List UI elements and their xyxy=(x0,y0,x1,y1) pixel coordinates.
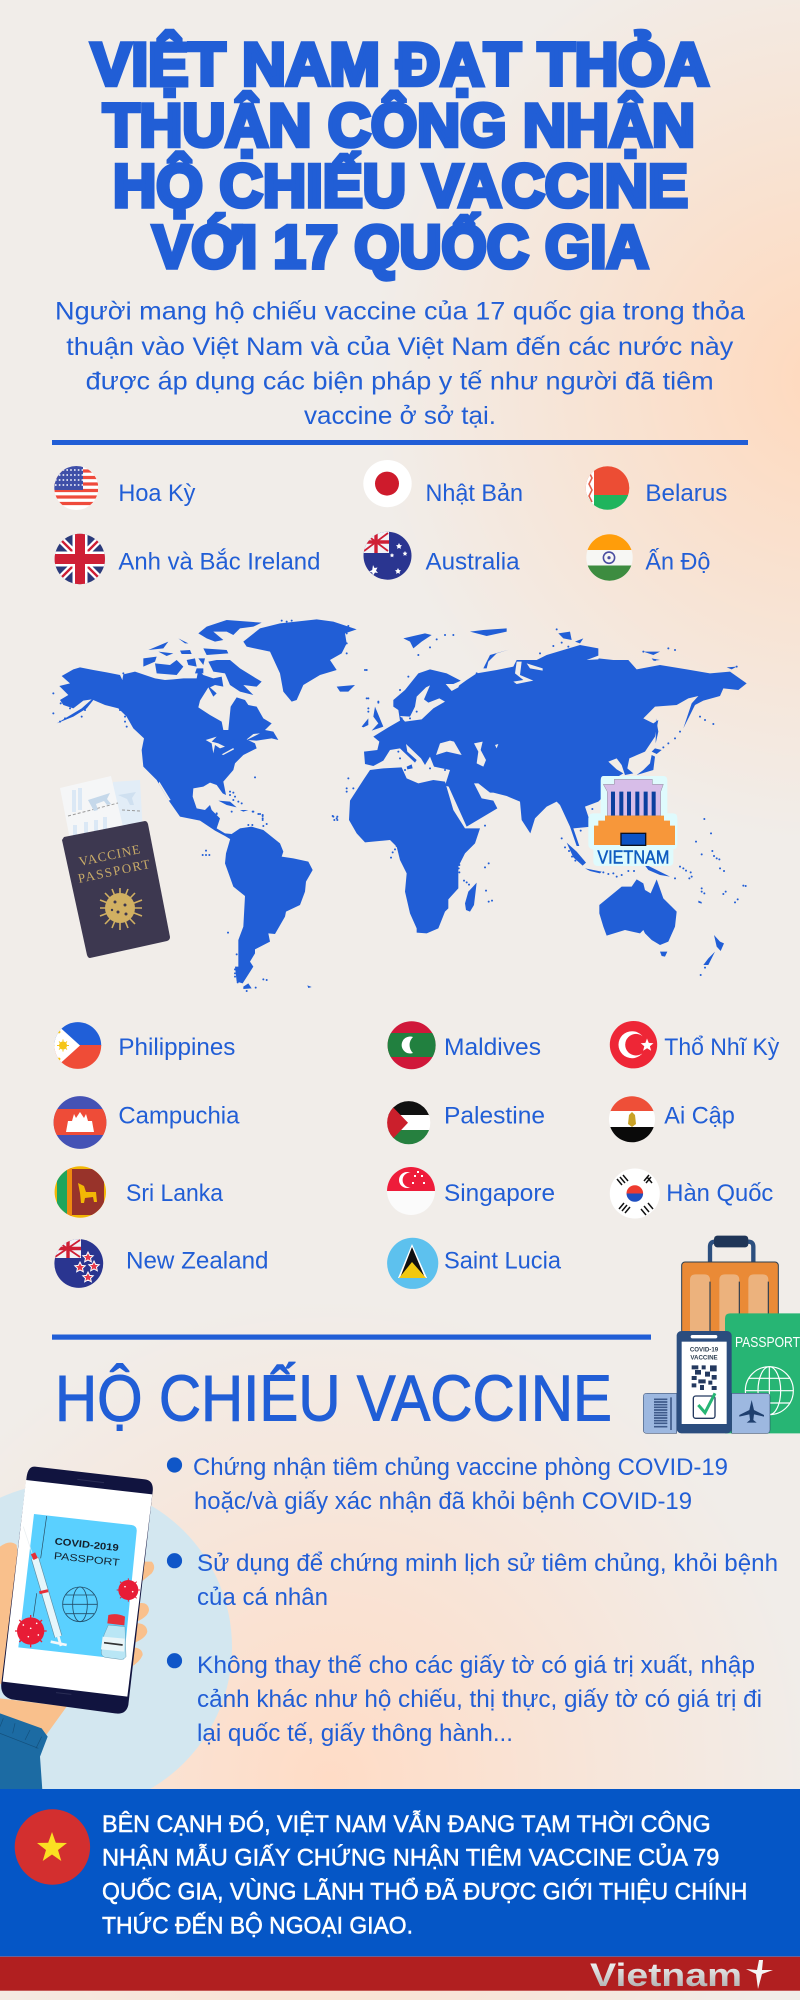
panel: bottom banner: QUỐC GIA, VÙNG LÃNH THỔ ĐÃ ĐƯỢC GIỚI THIỆU CHÍNH xyxy=(102,1878,747,1906)
flag row: Campuchia: Campuchia xyxy=(118,1102,240,1129)
virus emblem xyxy=(100,888,142,930)
icon: vaccine passport with tickets xyxy=(60,776,170,958)
flag row: Saint Lucia: Saint Lucia xyxy=(444,1248,562,1275)
South America and Madagascar xyxy=(203,812,492,991)
title: HỘ CHIẾU VACCINE xyxy=(113,153,688,220)
panel: bottom banner: NHẬN MẪU GIẤY CHỨNG NHẬN TIÊM VACCINE CỦA 79 xyxy=(102,1843,719,1872)
phone xyxy=(1,1467,153,1714)
intro paragraph: Người mang hộ chiếu vaccine của 17 quốc gia trong thỏa xyxy=(55,298,745,326)
Southeast Asia and Oceania xyxy=(562,809,746,975)
bullet 3: Không thay thế cho các giấy tờ có giá trị xuất, nhập xyxy=(197,1652,755,1679)
intro paragraph: vaccine ở sở tại. xyxy=(304,402,496,430)
flag row: Anh và Bắc Ireland xyxy=(54,533,320,585)
bullet 3: lại quốc tế, giấy thông hành... xyxy=(197,1720,513,1747)
icon: Vietnam flag xyxy=(15,1809,90,1885)
icon: luggage, phone and passport xyxy=(643,1236,800,1433)
flag row: Belarus xyxy=(585,466,727,511)
bullet 3: cảnh khác như hộ chiếu, thị thực, giấy tờ có giá trị đi xyxy=(197,1686,762,1713)
flag row: Ai Cập: Ai Cập xyxy=(664,1102,735,1129)
North America, Greenland and Arctic islands xyxy=(53,619,383,840)
flag row: Hàn Quốc xyxy=(610,1168,773,1218)
phone QR pass: COVID-19 xyxy=(690,1348,719,1354)
passport cover xyxy=(62,821,170,958)
flag row: Ai Cập xyxy=(609,1096,735,1143)
vial xyxy=(101,1625,126,1659)
bullet 1: Chứng nhận tiêm chủng vaccine phòng COVID-19 xyxy=(193,1454,728,1481)
flag row: Thổ Nhĩ Kỳ xyxy=(610,1021,779,1068)
intro paragraph: được áp dụng các biện pháp y tế như người đã tiêm xyxy=(86,368,714,396)
flag row: Australia: Australia xyxy=(426,548,520,576)
panel: hand holding phone xyxy=(0,1467,232,1811)
flag row: Maldives xyxy=(387,1021,541,1070)
flag row: Singapore: Singapore xyxy=(444,1180,555,1207)
boarding passes xyxy=(60,776,143,850)
globe xyxy=(63,1587,97,1622)
flag row: Hoa Kỳ xyxy=(54,466,195,510)
green passport xyxy=(725,1313,800,1433)
title: VIỆT NAM ĐẠT THỎA xyxy=(91,31,709,98)
flag row: Palestine xyxy=(387,1101,545,1145)
bullet list xyxy=(167,1454,778,1747)
flag row: Hàn Quốc: Hàn Quốc xyxy=(666,1180,773,1207)
flag row: Campuchia xyxy=(53,1096,240,1150)
phone screen passport xyxy=(18,1514,137,1659)
flag row: Ấn Độ: Ấn Độ xyxy=(645,548,710,576)
panel: bottom banner: BÊN CẠNH ĐÓ, VIỆT NAM VẪN ĐANG TẠM THỜI CÔNG xyxy=(102,1809,711,1838)
pale blue circle xyxy=(0,1483,232,1811)
phone QR pass xyxy=(677,1331,732,1433)
flag row: Thổ Nhĩ Kỳ: Thổ Nhĩ Kỳ xyxy=(664,1034,779,1061)
footer bar with logo: Vietnam xyxy=(590,1957,742,1993)
Eurasia and Africa xyxy=(349,628,747,933)
flag row: Maldives: Maldives xyxy=(444,1034,541,1061)
phone: PASSPORT xyxy=(53,1551,120,1569)
flag row: New Zealand xyxy=(54,1239,268,1289)
flag row: Saint Lucia xyxy=(387,1237,562,1290)
syringe xyxy=(23,1527,67,1646)
flag row: Nhật Bản xyxy=(363,460,523,507)
suitcase xyxy=(682,1236,778,1337)
flag row: Nhật Bản: Nhật Bản xyxy=(426,480,523,507)
flag row: Singapore xyxy=(386,1166,555,1215)
bullet 1 xyxy=(167,1454,728,1515)
flag row: Hoa Kỳ: Hoa Kỳ xyxy=(118,480,195,507)
bullet 2 xyxy=(167,1550,778,1611)
footer bar with logo xyxy=(0,1957,800,1993)
icon: Vietnam mausoleum sticker: VIETNAM xyxy=(597,846,669,867)
heading: Hộ chiếu vaccine: HỘ CHIẾU VACCINE xyxy=(55,1362,612,1435)
flag row: Anh và Bắc Ireland: Anh và Bắc Ireland xyxy=(118,548,320,576)
flag row: New Zealand: New Zealand xyxy=(126,1248,268,1275)
flag row: Sri Lanka: Sri Lanka xyxy=(126,1180,224,1207)
bullet 2: của cá nhân xyxy=(197,1584,328,1611)
intro paragraph xyxy=(55,298,745,430)
flag row: Philippines: Philippines xyxy=(118,1034,235,1061)
flag row: Belarus: Belarus xyxy=(645,480,727,507)
flag row: Ấn Độ xyxy=(586,534,710,582)
hand and sleeve xyxy=(0,1543,154,1790)
icon: vaccine passport with tickets: VACCINE xyxy=(78,841,141,869)
world map xyxy=(53,619,747,991)
bullet 1: hoặc/và giấy xác nhận đã khỏi bệnh COVID-19 xyxy=(194,1488,692,1515)
flag row: Australia xyxy=(363,531,520,581)
phone: COVID-2019 xyxy=(54,1536,120,1554)
bullet 3 xyxy=(167,1652,762,1747)
icon: Vietnam mausoleum sticker xyxy=(588,776,677,867)
phone QR pass: VACCINE xyxy=(690,1355,718,1361)
flag row: Sri Lanka xyxy=(55,1166,224,1218)
title xyxy=(91,31,709,281)
flag row: Philippines xyxy=(54,1022,235,1070)
boarding cards xyxy=(643,1393,677,1433)
viruses xyxy=(15,1578,140,1647)
panel: bottom banner: THỨC ĐẾN BỘ NGOẠI GIAO. xyxy=(102,1912,413,1940)
title: VỚI 17 QUỐC GIA xyxy=(152,214,648,281)
flag row: Palestine: Palestine xyxy=(444,1102,545,1129)
panel: bottom banner xyxy=(0,1789,800,1956)
intro paragraph: thuận vào Việt Nam và của Việt Nam đến các nước này xyxy=(66,333,734,361)
bullet 2: Sử dụng để chứng minh lịch sử tiêm chủng, khỏi bệnh xyxy=(197,1550,778,1577)
icon: vaccine passport with tickets: PASSPORT xyxy=(77,856,151,886)
title: THUẬN CÔNG NHẬN xyxy=(103,92,695,159)
